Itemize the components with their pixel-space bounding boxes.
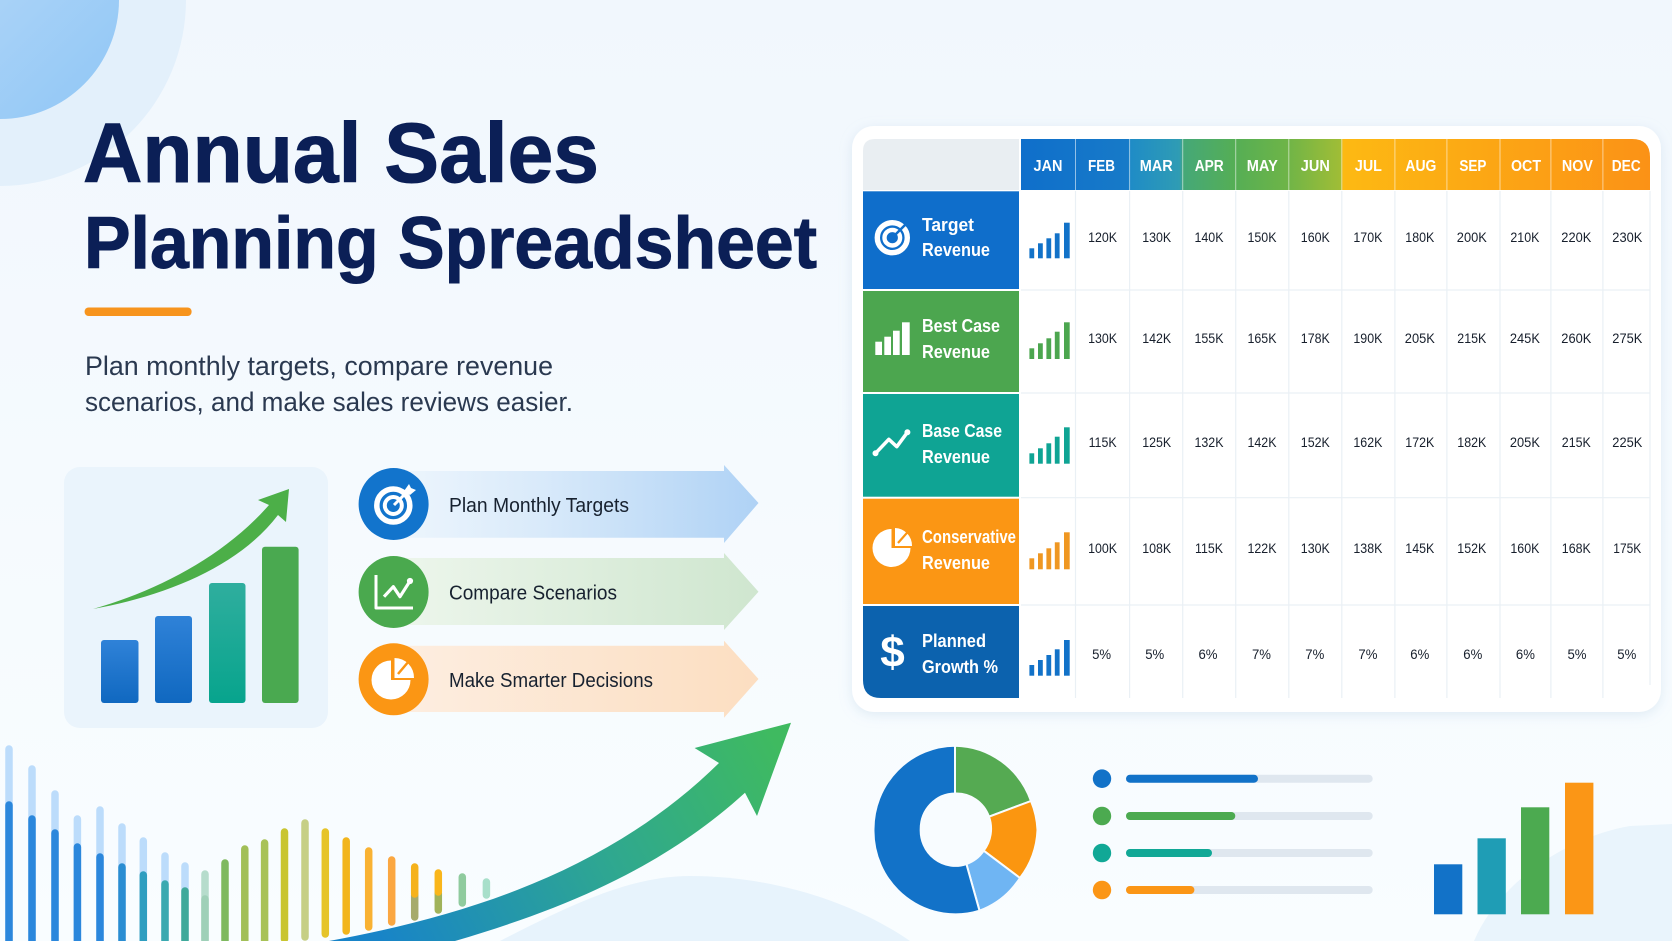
month header: DEC: [1612, 158, 1641, 175]
month header: MAR: [1140, 158, 1173, 175]
month header: OCT: [1511, 158, 1541, 175]
values: 230K: [1612, 229, 1643, 245]
values: 108K: [1142, 540, 1172, 556]
row: base case revenue: Revenue: [922, 447, 990, 467]
bars: [101, 547, 299, 703]
values: 160K: [1510, 540, 1540, 556]
values: 6%: [1410, 646, 1429, 662]
label: Plan Monthly Targets: [449, 495, 629, 517]
values: 130K: [1301, 540, 1330, 556]
icon: dollar: $: [880, 628, 905, 677]
mini bars: [1029, 223, 1070, 258]
values: 160K: [1301, 229, 1330, 245]
background wave: bottom centre: [500, 876, 910, 941]
values: 122K: [1248, 540, 1277, 556]
values: 152K: [1301, 434, 1330, 450]
values: 165K: [1248, 330, 1277, 346]
mini bars: [1029, 322, 1070, 359]
values: 215K: [1457, 330, 1487, 346]
step: plan monthly targets: [359, 465, 758, 543]
month header: [1021, 139, 1650, 190]
background wave: bottom right: [1474, 824, 1672, 941]
values: 7%: [1358, 646, 1377, 662]
month header: FEB: [1088, 158, 1115, 175]
values: [1088, 330, 1643, 346]
big growth arrow: [329, 723, 791, 941]
panel: growth bar chart: [64, 467, 328, 728]
values: 6%: [1516, 646, 1535, 662]
values: 168K: [1562, 540, 1591, 556]
values: 260K: [1561, 330, 1592, 346]
values: 145K: [1405, 540, 1435, 556]
donut chart: [873, 746, 1038, 914]
values: 182K: [1457, 434, 1487, 450]
icon: bars: [875, 322, 910, 355]
month header: JAN: [1034, 158, 1062, 175]
icon: trend line: [873, 430, 910, 456]
values: 115K: [1195, 540, 1224, 556]
values: 5%: [1568, 646, 1586, 662]
values: 245K: [1510, 330, 1541, 346]
icon: line chart: [376, 575, 413, 608]
row: base case revenue: Base Case: [922, 421, 1002, 441]
values: 152K: [1457, 540, 1487, 556]
values: 140K: [1194, 229, 1224, 245]
icon: growth arrow: [93, 489, 289, 609]
values: 120K: [1088, 229, 1118, 245]
title: Planning Spreadsheet: [84, 203, 817, 284]
row: planned growth: Growth %: [922, 657, 998, 677]
month header: JUN: [1301, 158, 1330, 175]
values: 175K: [1613, 540, 1642, 556]
values: 205K: [1510, 434, 1541, 450]
mini bars: [1029, 427, 1070, 464]
values: 130K: [1142, 229, 1172, 245]
mini bars: [1029, 532, 1070, 569]
values: [1089, 434, 1643, 450]
month header: AUG: [1405, 158, 1436, 175]
values: 7%: [1305, 646, 1324, 662]
values: 130K: [1088, 330, 1118, 346]
values: 225K: [1612, 434, 1643, 450]
row: best case revenue: [863, 291, 1643, 392]
row: conservative revenue: Conservative: [922, 527, 1016, 547]
row: best case revenue: Revenue: [922, 342, 990, 362]
subtitle: Plan monthly targets, compare revenue: [85, 351, 553, 381]
table header corner cell: [863, 139, 1019, 190]
values: 200K: [1457, 229, 1487, 245]
values: 132K: [1194, 434, 1224, 450]
values: 6%: [1463, 646, 1482, 662]
subtitle: scenarios, and make sales reviews easier.: [85, 387, 573, 417]
values: 205K: [1405, 330, 1435, 346]
values: 7%: [1252, 646, 1271, 662]
values: 215K: [1562, 434, 1591, 450]
values: 6%: [1198, 646, 1218, 662]
background circle: top left: [0, 0, 186, 186]
month header: MAY: [1247, 158, 1278, 175]
values: 172K: [1405, 434, 1435, 450]
row: target revenue: Revenue: [922, 240, 990, 260]
values: 180K: [1405, 229, 1435, 245]
subtitle: [85, 351, 573, 417]
values: [1092, 646, 1636, 662]
panel: table card: [852, 126, 1661, 712]
values: 115K: [1089, 434, 1117, 450]
icon: pie: [873, 528, 912, 567]
mini bars: [1029, 640, 1070, 676]
values: 100K: [1088, 540, 1118, 556]
values: 5%: [1145, 646, 1164, 662]
title: [83, 106, 817, 284]
values: 275K: [1612, 330, 1643, 346]
values: 138K: [1353, 540, 1383, 556]
title: Annual Sales: [83, 106, 599, 200]
month header: JUL: [1355, 158, 1382, 175]
row: best case revenue: Best Case: [922, 316, 1000, 336]
row: conservative revenue: Revenue: [922, 553, 990, 573]
row: planned growth: Planned: [922, 631, 986, 651]
row: base case revenue: [863, 394, 1643, 497]
month header: NOV: [1562, 158, 1593, 175]
icon: pie chart: [372, 658, 414, 700]
decorative bar wave chart: [9, 749, 486, 941]
month header: APR: [1195, 158, 1224, 175]
values: 5%: [1617, 646, 1636, 662]
label: Make Smarter Decisions: [449, 670, 653, 692]
values: 210K: [1510, 229, 1540, 245]
row: conservative revenue: [863, 499, 1642, 604]
month header: SEP: [1459, 158, 1487, 175]
values: 220K: [1561, 229, 1592, 245]
values: 142K: [1248, 434, 1277, 450]
title accent bar: [85, 308, 192, 316]
row: planned growth: [863, 606, 1636, 698]
label: Compare Scenarios: [449, 582, 617, 604]
values: 170K: [1353, 229, 1383, 245]
values: 5%: [1092, 646, 1111, 662]
values: 190K: [1353, 330, 1383, 346]
values: [1088, 229, 1643, 245]
values: 162K: [1353, 434, 1383, 450]
step: make smarter decisions: [359, 641, 758, 718]
values: 178K: [1301, 330, 1330, 346]
values: 150K: [1248, 229, 1277, 245]
icon: target: [377, 484, 416, 522]
values: 155K: [1194, 330, 1224, 346]
icon: target: [877, 223, 907, 253]
step: compare scenarios: [359, 553, 758, 630]
values: 125K: [1142, 434, 1172, 450]
values: [1088, 540, 1642, 556]
legend with progress bars: [1093, 769, 1373, 899]
small bar chart: [1434, 783, 1593, 914]
values: 142K: [1142, 330, 1172, 346]
row: target revenue: [863, 191, 1643, 289]
row: target revenue: Target: [922, 215, 974, 235]
